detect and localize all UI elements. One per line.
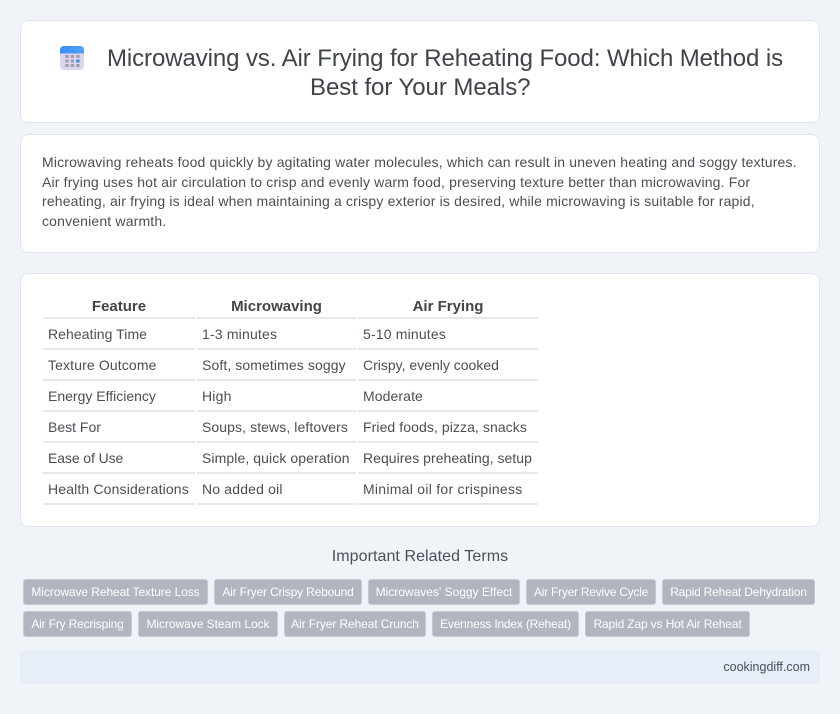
text block: introduction: convenient warmth. — [42, 213, 166, 229]
table: feature comparison: Soft, sometimes soggy — [202, 357, 346, 373]
tag: Air Fry Recrisping — [31, 617, 124, 631]
tag — [432, 611, 579, 637]
panel: comparison table — [20, 273, 820, 527]
tag: Rapid Zap vs Hot Air Reheat — [593, 617, 742, 631]
table: feature comparison: Energy Efficiency — [48, 388, 156, 404]
tag — [214, 579, 362, 605]
table: feature comparison — [43, 298, 538, 505]
table: feature comparison: Moderate — [363, 388, 423, 404]
table: feature comparison: High — [202, 388, 232, 404]
tag: Microwaves' Soggy Effect — [376, 585, 512, 599]
heading: related terms: Important Related Terms — [332, 548, 508, 565]
tag — [138, 611, 278, 637]
table: feature comparison: Best For — [48, 419, 101, 435]
table: feature comparison: Fried foods, pizza, snacks — [363, 419, 527, 435]
panel: introduction — [20, 134, 820, 253]
table: feature comparison: Reheating Time — [48, 326, 147, 342]
panel: title card — [20, 20, 820, 123]
icon: calendar — [60, 46, 84, 70]
table: feature comparison: Minimal oil for crispiness — [363, 481, 523, 497]
table: feature comparison: Crispy, evenly cooked — [363, 357, 499, 373]
table heading: Air Frying: Air Frying — [413, 298, 483, 315]
tag: Microwave Reheat Texture Loss — [31, 585, 200, 599]
tag list: related terms — [23, 579, 815, 637]
tag: Air Fryer Crispy Rebound — [222, 585, 354, 599]
tag — [23, 579, 208, 605]
tag — [284, 611, 426, 637]
tag: Air Fryer Revive Cycle — [534, 585, 648, 599]
table: feature comparison: Health Considerations — [48, 481, 189, 497]
tag — [368, 579, 520, 605]
text block: introduction: Microwaving reheats food quickly by agitating water molecules, which can result in uneven heating and soggy textures. — [42, 154, 797, 170]
tag: Microwave Steam Lock — [146, 617, 270, 631]
text block: introduction: Air frying uses hot air circulation to crisp and evenly warm food, preserving texture better than microwaving. For — [42, 174, 750, 190]
tag — [585, 611, 750, 637]
table: feature comparison: Texture Outcome — [48, 357, 157, 373]
table: feature comparison: Requires preheating, setup — [363, 450, 532, 466]
tag: Rapid Reheat Dehydration — [670, 585, 807, 599]
tag — [526, 579, 656, 605]
table heading: Feature: Feature — [92, 298, 146, 315]
table: feature comparison: Simple, quick operation — [202, 450, 350, 466]
footer source: cookingdiff.com — [723, 660, 810, 674]
table: feature comparison: 5-10 minutes — [363, 326, 446, 342]
text block: introduction — [42, 154, 797, 229]
table: feature comparison: No added oil — [202, 481, 283, 497]
footer bar — [20, 650, 820, 684]
title: Microwaving vs. Air Frying for Reheating Food: Which Method is — [107, 45, 783, 72]
tag: Evenness Index (Reheat) — [440, 617, 571, 631]
tag — [662, 579, 815, 605]
table heading: Microwaving: Microwaving — [231, 298, 322, 315]
title — [107, 45, 783, 101]
table: feature comparison: Soups, stews, leftovers — [202, 419, 348, 435]
title: Best for Your Meals? — [310, 74, 530, 101]
tag — [23, 611, 132, 637]
table: feature comparison: Ease of Use — [48, 450, 123, 466]
table: feature comparison: 1-3 minutes — [202, 326, 277, 342]
text block: introduction: reheating, air frying is ideal when maintaining a crispy exterior is desired, while microwaving is suitable for rapid, — [42, 193, 755, 209]
tag: Air Fryer Reheat Crunch — [291, 617, 419, 631]
